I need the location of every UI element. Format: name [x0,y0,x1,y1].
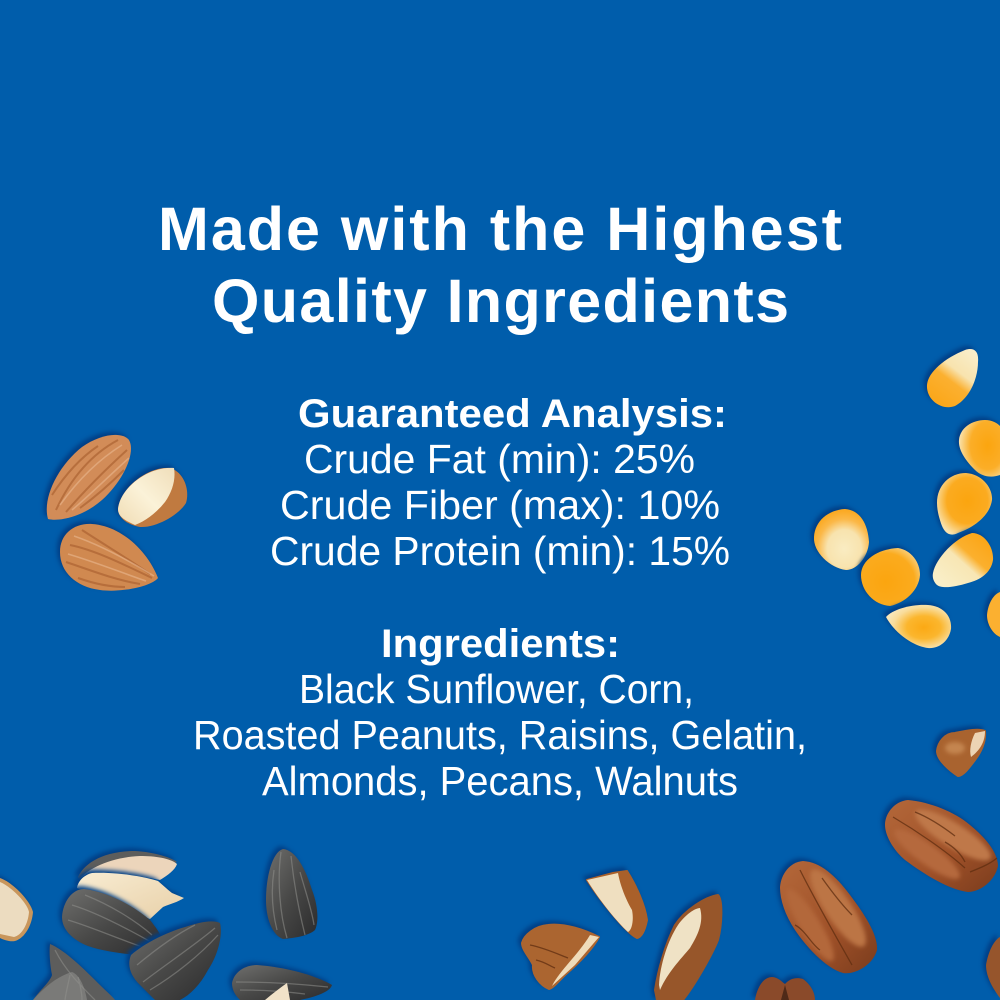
guaranteed analysis text block [270,392,730,574]
icon: almonds [47,435,187,591]
guaranteed analysis text block: Guaranteed Analysis: [298,392,727,436]
ingredients text block: Almonds, Pecans, Walnuts [262,758,738,804]
icon: sunflower seeds [0,849,332,1000]
pecan at right edge [986,937,1000,998]
open shell at left edge [0,878,33,941]
ingredients text block: Black Sunflower, Corn, [299,666,694,712]
ingredients text block [193,622,807,804]
guaranteed analysis text block: Crude Fat (min): 25% [304,436,695,482]
ingredients text block: Roasted Peanuts, Raisins, Gelatin, [193,712,807,758]
guaranteed analysis text block: Crude Protein (min): 15% [270,528,730,574]
pecan at bottom edge [755,977,815,1000]
guaranteed analysis text block: Crude Fiber (max): 10% [280,482,720,528]
icon: pecans [522,730,1000,1000]
icon: corn kernels [814,349,1000,648]
title: Made with the Highest [158,195,842,263]
corn kernel at right edge [987,592,1000,637]
title: Quality Ingredients [212,267,789,335]
title [158,195,842,335]
ingredients text block: Ingredients: [381,622,620,666]
